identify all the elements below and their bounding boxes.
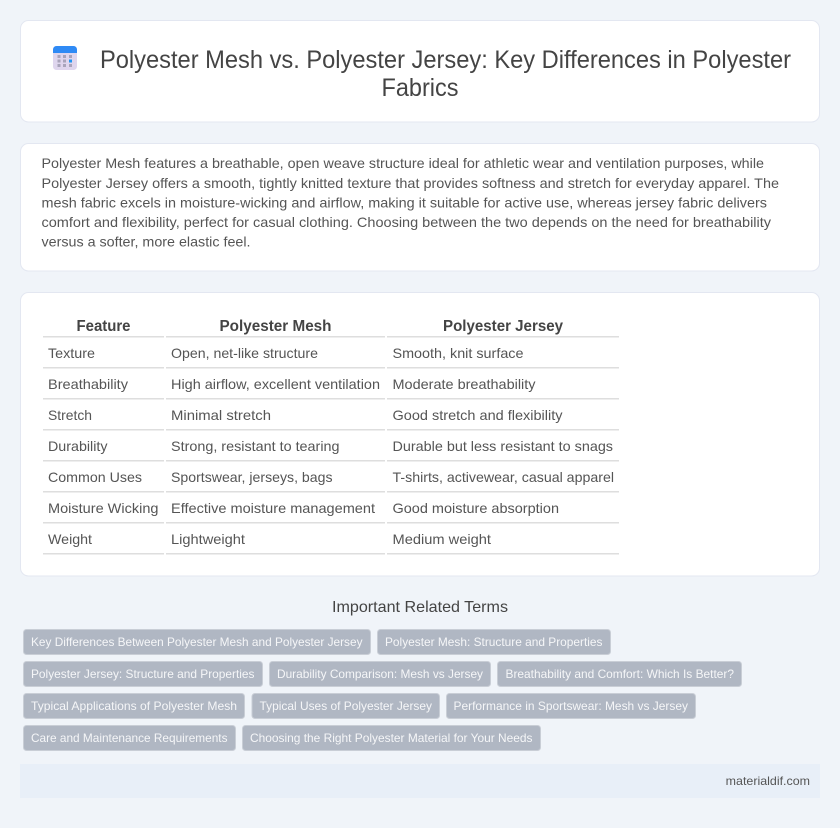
row: texture bbox=[43, 345, 619, 368]
row: stretch: Minimal stretch bbox=[171, 407, 271, 423]
row: weight bbox=[43, 531, 619, 554]
row: durability: Durable but less resistant to snags bbox=[392, 438, 613, 454]
panel: summary paragraph: comfort and flexibility, perfect for casual clothing. Choosing between the two depends on the need for breathability bbox=[42, 214, 771, 230]
footer bar bbox=[20, 764, 820, 798]
panel: summary paragraph: Polyester Mesh features a breathable, open weave structure ideal for athletic wear and ventilation purposes, while bbox=[42, 155, 764, 171]
table header row: Polyester Jersey bbox=[443, 318, 563, 335]
related term tags: Polyester Mesh: Structure and Properties bbox=[385, 635, 602, 649]
row: weight: Medium weight bbox=[392, 531, 491, 547]
table header row: Polyester Mesh bbox=[220, 318, 332, 335]
related term tags: Typical Applications of Polyester Mesh bbox=[31, 699, 237, 713]
row: breathability: High airflow, excellent ventilation bbox=[171, 376, 380, 392]
panel: header bbox=[20, 20, 820, 122]
row: breathability: Breathability bbox=[48, 376, 128, 392]
related term tags: Care and Maintenance Requirements bbox=[31, 731, 228, 745]
related term tags: Choosing the Right Polyester Material for Your Needs bbox=[250, 731, 532, 745]
row: stretch: Stretch bbox=[48, 407, 92, 423]
related term tags: Breathability and Comfort: Which Is Better? bbox=[506, 667, 734, 681]
row: stretch bbox=[43, 407, 619, 430]
panel: summary paragraph: versus a softer, more elastic feel. bbox=[42, 234, 250, 250]
related term tags: Polyester Jersey: Structure and Properties bbox=[31, 667, 254, 681]
row: stretch: Good stretch and flexibility bbox=[392, 407, 562, 423]
row: texture: Smooth, knit surface bbox=[392, 345, 524, 361]
related term tags: Typical Uses of Polyester Jersey bbox=[260, 699, 432, 713]
panel: comparison table bbox=[20, 292, 820, 576]
row: weight: Weight bbox=[48, 531, 92, 547]
title: Fabrics bbox=[382, 74, 458, 102]
related term tags bbox=[24, 630, 742, 750]
panel: summary paragraph: Polyester Jersey offers a smooth, tightly knitted texture that provides softness and stretch for everyday apparel. The bbox=[42, 175, 779, 191]
heading: important related terms: Important Related Terms bbox=[332, 599, 508, 616]
title: Polyester Mesh vs. Polyester Jersey: Key Differences in Polyester bbox=[100, 46, 791, 74]
row: common uses: Sportswear, jerseys, bags bbox=[171, 469, 332, 485]
panel: summary paragraph: mesh fabric excels in moisture-wicking and airflow, making it suitable for active use, whereas jersey fabric delivers bbox=[42, 194, 767, 210]
row: durability bbox=[43, 438, 619, 462]
panel: summary paragraph bbox=[20, 144, 820, 271]
row: common uses bbox=[43, 469, 619, 492]
footer bar: materialdif.com bbox=[726, 774, 810, 788]
row: texture: Open, net-like structure bbox=[171, 345, 318, 361]
related term tags: Key Differences Between Polyester Mesh and Polyester Jersey bbox=[31, 635, 362, 649]
related term tags: Performance in Sportswear: Mesh vs Jersey bbox=[454, 699, 688, 713]
row: common uses: Common Uses bbox=[48, 469, 142, 485]
row: breathability bbox=[43, 376, 619, 400]
related term tags: Durability Comparison: Mesh vs Jersey bbox=[277, 667, 483, 681]
row: moisture wicking bbox=[43, 500, 619, 524]
row: common uses: T-shirts, activewear, casual apparel bbox=[392, 469, 614, 485]
icon: calendar bbox=[53, 46, 77, 70]
row: texture: Texture bbox=[48, 345, 95, 361]
row: weight: Lightweight bbox=[171, 531, 245, 547]
row: moisture wicking: Effective moisture management bbox=[171, 500, 375, 516]
row: moisture wicking: Moisture Wicking bbox=[48, 500, 158, 516]
title bbox=[100, 46, 791, 102]
table header row bbox=[43, 318, 619, 338]
row: moisture wicking: Good moisture absorption bbox=[392, 500, 559, 516]
row: durability: Durability bbox=[48, 438, 108, 454]
row: durability: Strong, resistant to tearing bbox=[171, 438, 340, 454]
row: breathability: Moderate breathability bbox=[392, 376, 536, 392]
table header row: Feature bbox=[76, 318, 131, 335]
